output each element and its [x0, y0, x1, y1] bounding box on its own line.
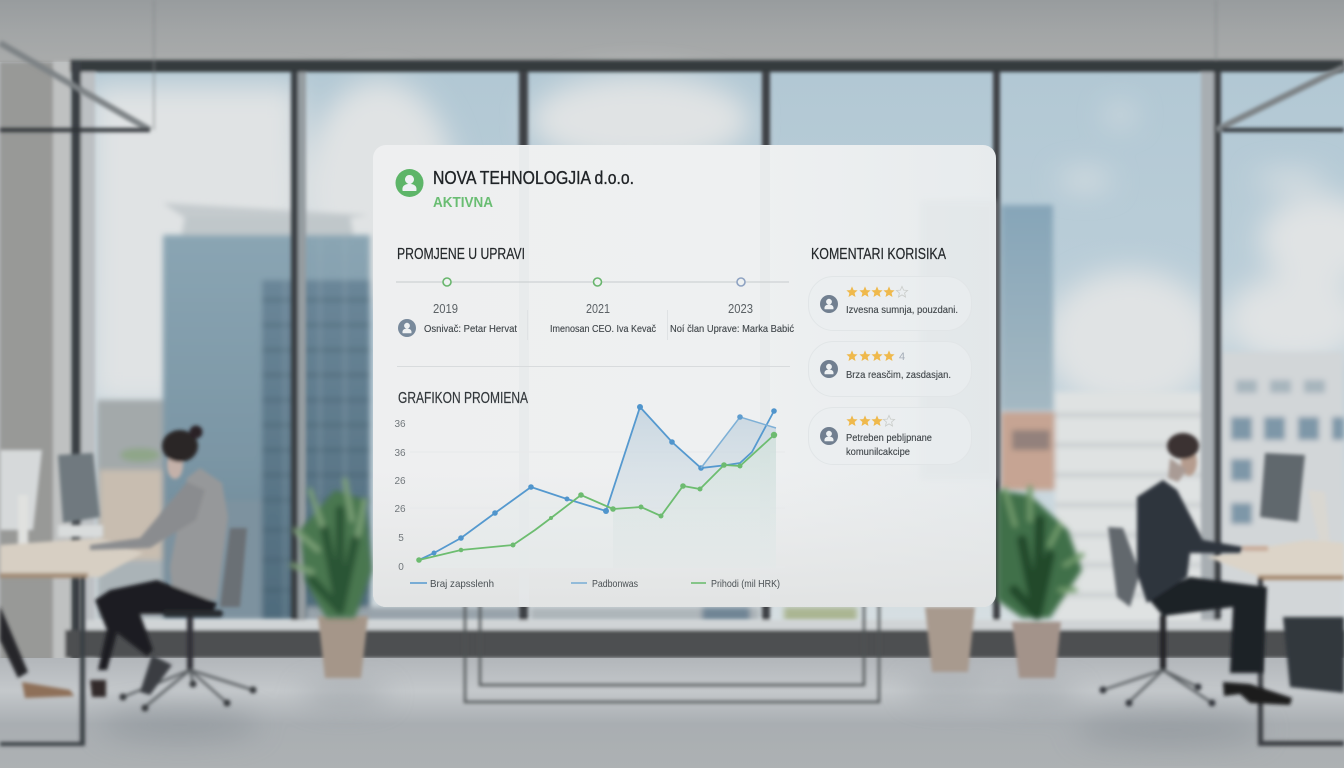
icon: company avatar [396, 169, 424, 197]
timeline entry 2021: Imenosan CEO. Iva Kevač [550, 323, 656, 335]
timeline entry 2019: 2019 [433, 302, 458, 316]
y axis labels: 26 [394, 504, 406, 515]
heading: GRAFIKON PROMIENA [398, 390, 529, 407]
chart legend: Padbonwas [592, 578, 638, 590]
chart legend [410, 578, 780, 590]
timeline entry 2019: Osnivač: Petar Hervat [424, 323, 517, 335]
section: management changes [396, 246, 794, 366]
y axis labels: 36 [394, 419, 406, 430]
comment card 1: Izvesna sumnja, pouzdani. [846, 304, 958, 316]
floor [0, 658, 1344, 768]
section: user comments [808, 246, 972, 464]
comment card 1 [808, 276, 972, 330]
comment card 3: komunilcakcipe [846, 446, 910, 458]
comment card 2: 4 [899, 351, 905, 363]
timeline entry 2021: 2021 [586, 302, 610, 316]
right desk, cabinet and monitor [1207, 453, 1344, 746]
centre table frame [465, 600, 879, 702]
timeline entry 2021 [550, 302, 656, 335]
comment card 3 [808, 408, 972, 464]
area fills [606, 407, 776, 568]
comment card 3: Petreben pebljpnane [846, 432, 932, 444]
y axis labels: 36 [394, 448, 406, 459]
glass dashboard panel [373, 145, 996, 607]
timeline entry 2023: Noí član Uprave: Marka Babić [670, 323, 794, 335]
sky and clouds [70, 70, 1344, 630]
timeline [396, 278, 789, 286]
window frame [0, 60, 1344, 662]
ceiling beams [0, 0, 1344, 130]
status: AKTIVNA [433, 194, 493, 211]
distant buildings [97, 203, 1344, 624]
y axis labels: 0 [398, 562, 404, 573]
y axis labels [394, 419, 406, 573]
company name: NOVA TEHNOLOGJIA d.o.o. [433, 168, 634, 188]
heading: PROMJENE U UPRAVI [397, 246, 525, 263]
line chart [394, 404, 785, 573]
y axis labels: 26 [394, 476, 406, 487]
y axis labels: 5 [398, 533, 404, 544]
middle pot [925, 607, 975, 672]
comment card 2: Brza reasčim, zasdasjan. [846, 369, 951, 381]
timeline entry 2019 [398, 302, 517, 337]
left desk and monitors [0, 450, 143, 746]
chart legend: Braj zapsslenh [430, 578, 494, 590]
timeline entry 2023: 2023 [728, 302, 753, 316]
chart legend: Prihodi (mil HRK) [711, 578, 780, 590]
comment card 2 [808, 342, 972, 396]
right plant [997, 488, 1082, 678]
company header [396, 168, 634, 211]
series: revenue [416, 432, 777, 563]
heading: KOMENTARI KORISIKA [811, 246, 947, 263]
woman at desk [90, 426, 256, 712]
floor shadows [100, 680, 1265, 746]
man at desk [1100, 433, 1292, 706]
series: employees [419, 404, 777, 560]
timeline entry 2023 [670, 302, 794, 335]
ceiling [0, 0, 1344, 62]
section: change chart [394, 390, 785, 590]
left plant [292, 480, 372, 678]
series: second blue [701, 414, 776, 468]
